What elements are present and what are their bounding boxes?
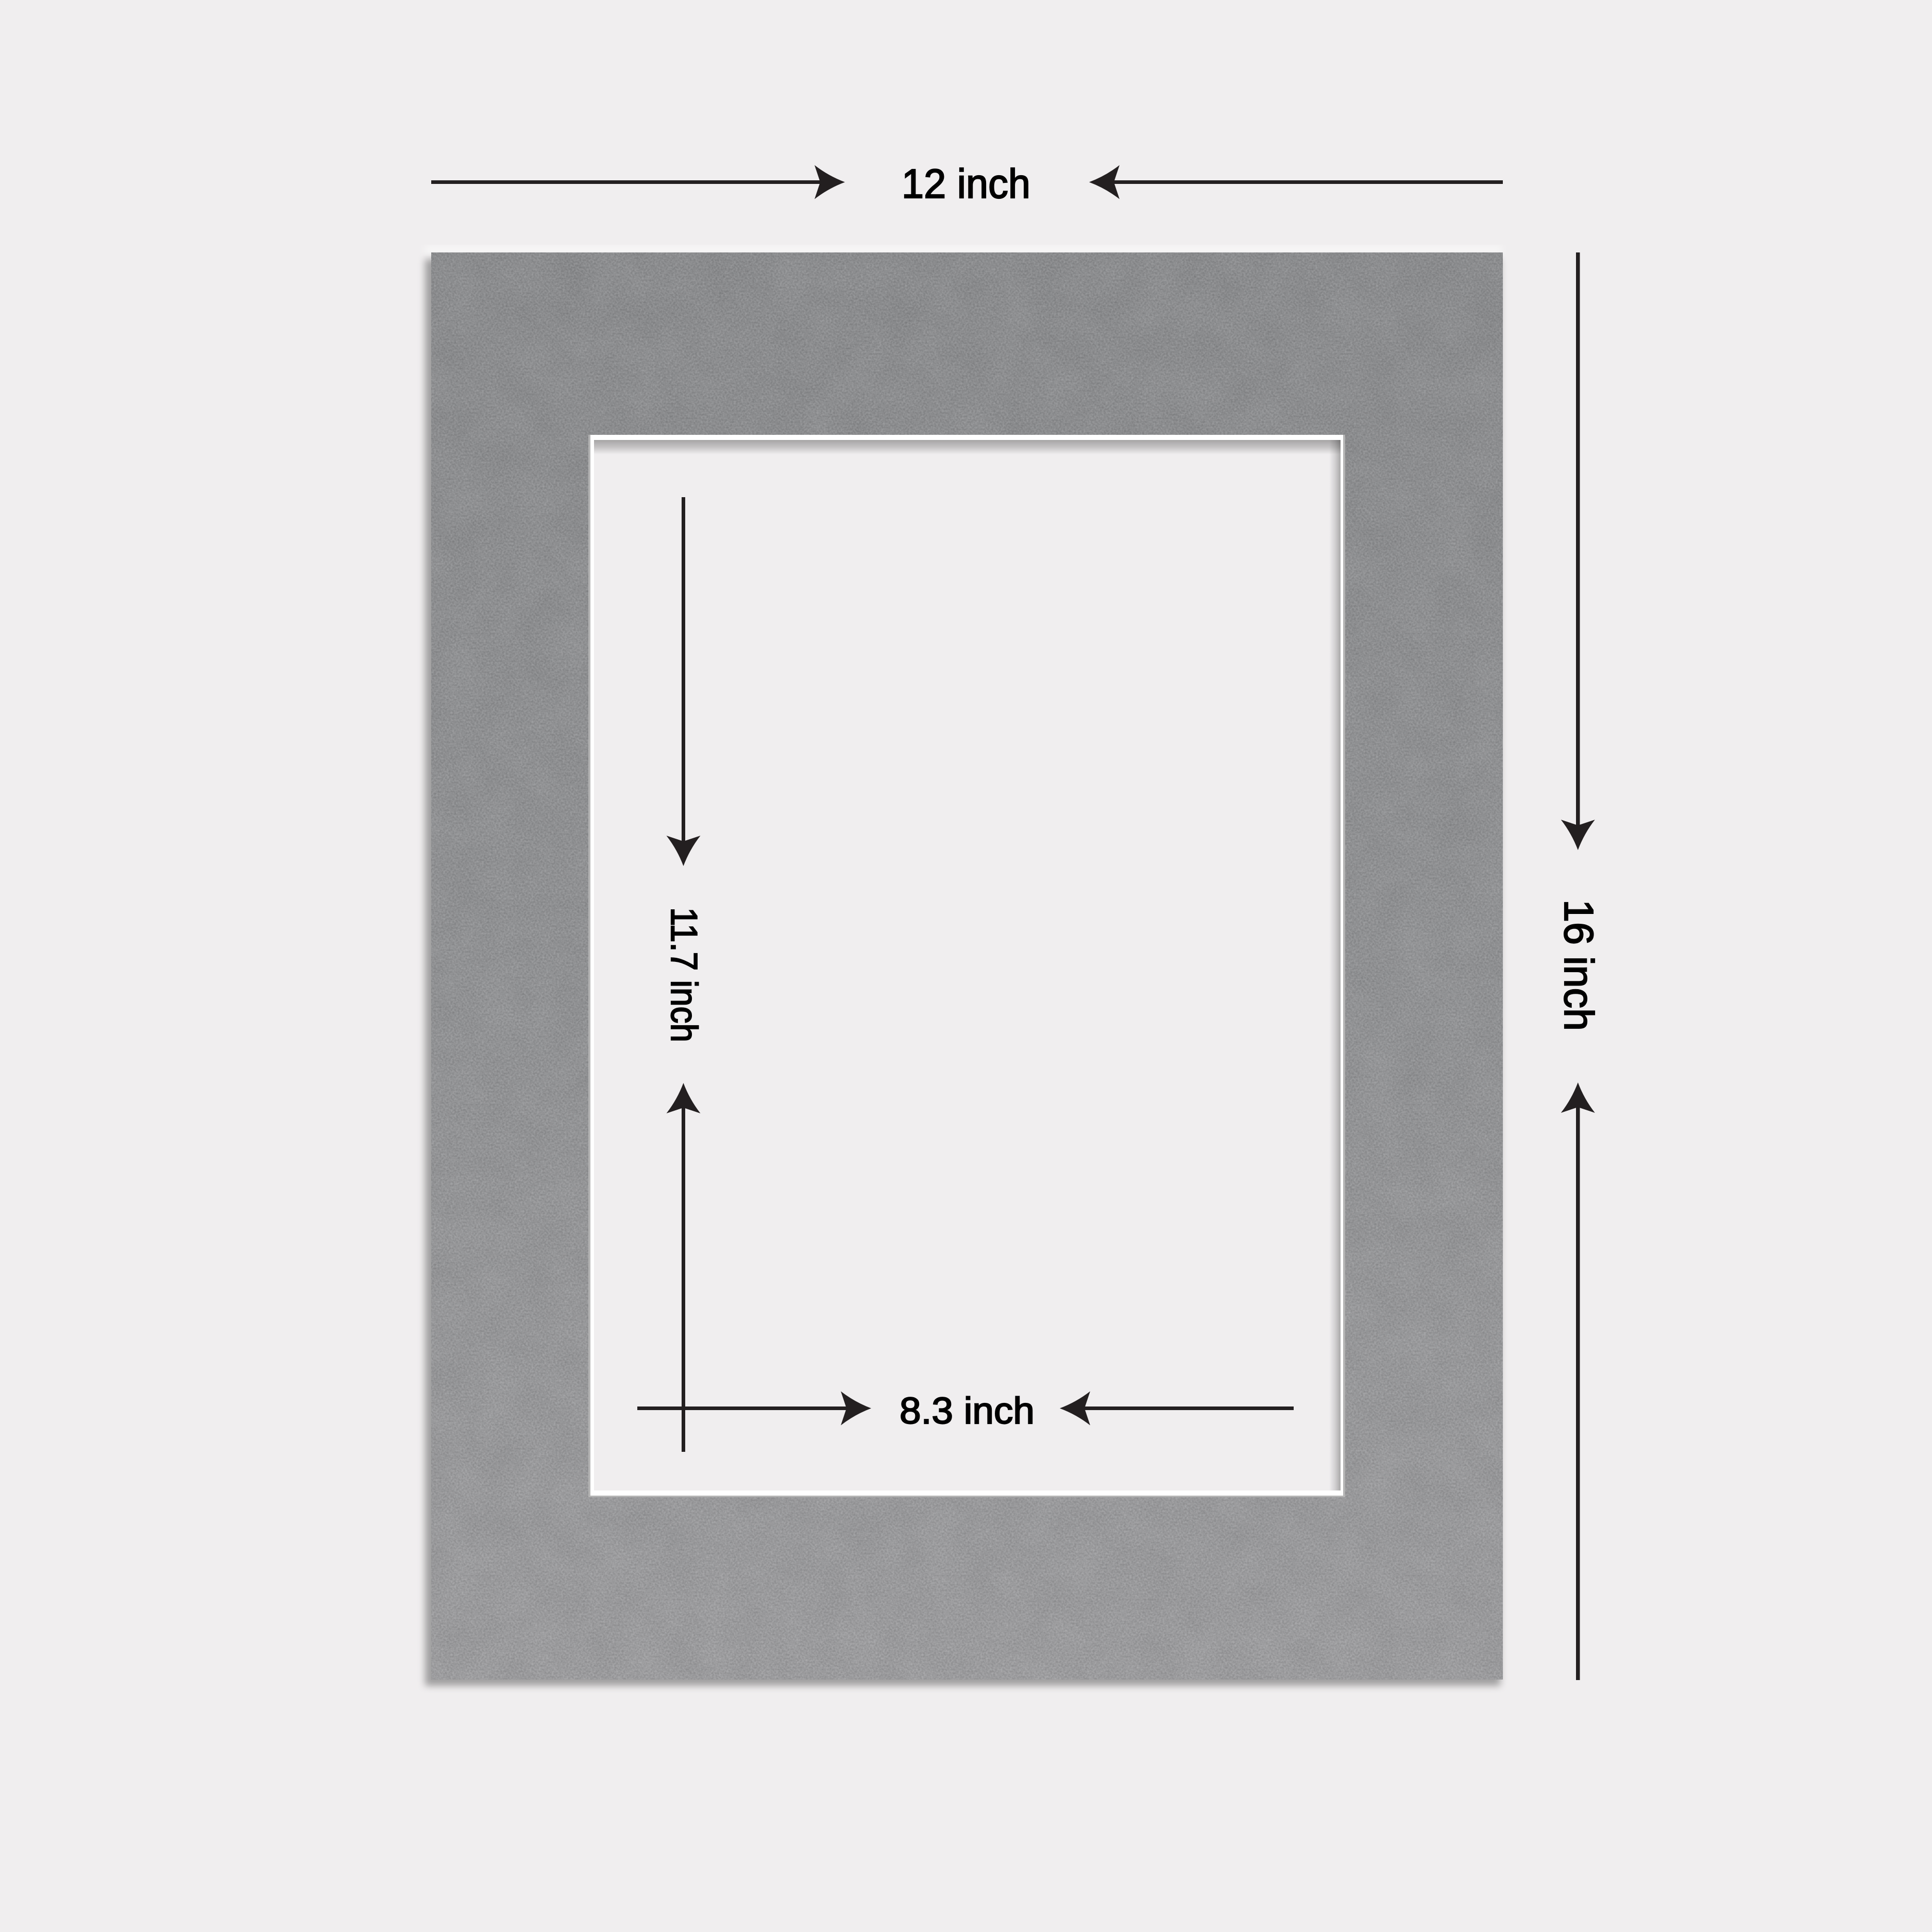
- arrow: opening height top: [667, 497, 701, 866]
- picture mat: [425, 245, 1503, 1686]
- arrow: opening width right: [1060, 1391, 1294, 1425]
- mat board: [431, 252, 1503, 1680]
- arrow: outer width left: [431, 165, 845, 199]
- mat drop shadow: [425, 259, 1500, 1686]
- inner right shadow: [1329, 440, 1341, 1490]
- label: opening width: 8.3 inch: [900, 1391, 1035, 1432]
- arrow: outer width right: [1089, 165, 1503, 199]
- white bevel: [590, 435, 1343, 1496]
- label: opening height: 11.7 inch: [663, 907, 704, 1042]
- inner top shadow: [594, 440, 1341, 454]
- bevel outer edge: [588, 435, 1345, 1497]
- label: outer width: 12 inch: [902, 161, 1030, 207]
- mat opening: [588, 435, 1345, 1497]
- arrow: opening width left: [637, 1391, 871, 1425]
- arrow: outer height top: [1561, 252, 1595, 850]
- arrow: opening height bottom: [667, 1083, 701, 1452]
- mat top glow: [425, 245, 1502, 256]
- opening interior: [594, 440, 1341, 1490]
- arrow: outer height bottom: [1561, 1082, 1595, 1680]
- label: outer height: 16 inch: [1556, 900, 1602, 1031]
